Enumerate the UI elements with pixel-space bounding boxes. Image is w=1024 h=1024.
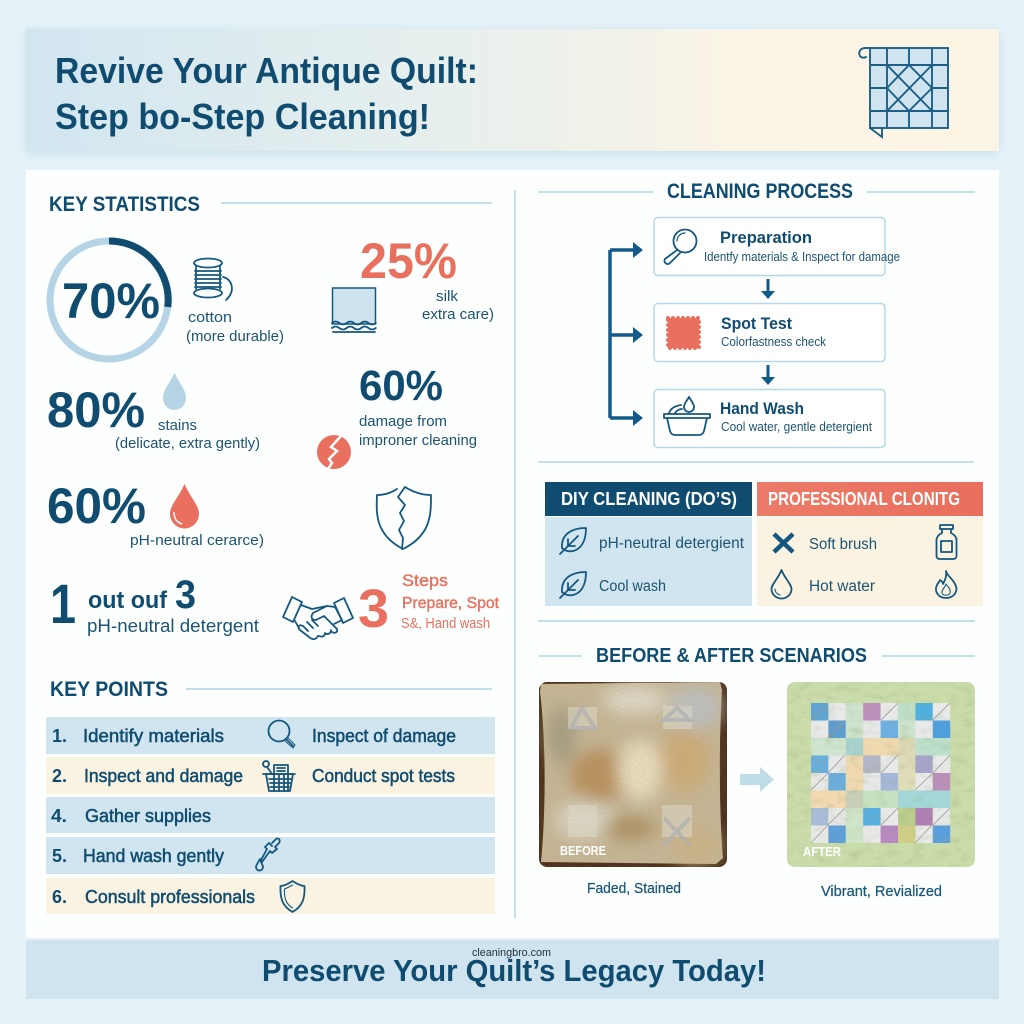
icon: thread spool [194, 258, 232, 300]
stat: 60% damage: damage from [359, 413, 447, 430]
arrow: down 1 [761, 279, 775, 299]
icon: wash basin [664, 397, 710, 435]
row 5 [46, 837, 495, 874]
panel: before and after: Vibrant, Revialized [821, 884, 942, 900]
icon: shield [280, 881, 305, 912]
heading: cleaning process: CLEANING PROCESS [667, 180, 853, 203]
header banner [26, 29, 999, 151]
footer banner: Preserve Your Quilt’s Legacy Today! [262, 953, 766, 988]
stat: 80% stains: (delicate, extra gently) [115, 435, 260, 452]
step: preparation [654, 218, 900, 276]
panel: professional cleaning: Hot water [809, 578, 875, 595]
label: after: AFTER [803, 845, 841, 859]
icon: broken circle [317, 435, 351, 469]
row 1: 1. [52, 726, 67, 746]
icon: magnifier [664, 230, 696, 264]
panel: key statistics [47, 193, 500, 639]
row 5: 5. [52, 846, 67, 866]
stat: 1 out of 3: 1 [50, 572, 76, 635]
icon: flame [936, 571, 956, 598]
panel: key points [46, 678, 495, 914]
panel: before and after [539, 645, 975, 900]
stat: 3 steps: Prepare, Spot [402, 595, 500, 612]
stat: 60% pH-neutral [47, 478, 264, 549]
stat: 60% damage: 60% [359, 362, 443, 410]
icon: leaf 2 [560, 572, 586, 598]
panel: professional cleaning: PROFESSIONAL CLONITG [768, 489, 960, 509]
panel: DIY cleaning: pH-neutral detergient [599, 535, 745, 552]
stat: 80% stains: stains [158, 417, 197, 434]
stat: 60% pH-neutral: 60% [47, 478, 146, 534]
icon: red drop [170, 484, 199, 528]
stat: 60% pH-neutral: pH-neutral cerarce) [130, 532, 264, 549]
row 2: 2. [52, 766, 67, 786]
row 1 [46, 717, 495, 754]
stat: 25% silk: extra care) [422, 306, 494, 323]
row 4: 4. [51, 806, 67, 826]
panel: DIY cleaning: DIY CLEANING (DO’S) [561, 489, 737, 509]
step: spot test: Colorfastness check [721, 335, 827, 349]
row 5: Hand wash gently [83, 846, 224, 866]
title: Step bo-Step Cleaning! [55, 96, 430, 137]
stat: 80% stains: 80% [47, 382, 145, 438]
panel: DIY cleaning [545, 482, 752, 606]
stat: 70% cotton: (more durable) [186, 328, 284, 345]
stat: 70% cotton: cotton [188, 309, 232, 326]
stat: 1 out of 3: pH-neutral detergent [87, 616, 259, 636]
stat: 60% damage: improner cleaning [359, 432, 477, 449]
icon: dropper [256, 838, 280, 870]
stat: 80% stains [47, 373, 260, 452]
photo: before quilt [539, 682, 727, 867]
label: before: BEFORE [560, 844, 606, 858]
footer banner: cleaningbro.com [472, 947, 551, 959]
panel: professional cleaning [757, 482, 983, 606]
stat: 25% silk: 25% [360, 233, 457, 289]
row 6 [46, 878, 495, 914]
stat: 1 out of 3: 3 [175, 573, 196, 617]
icon: fabric swatch [668, 318, 699, 348]
panel: before and after: Faded, Stained [587, 881, 681, 897]
stat: 3 steps: Steps [402, 571, 448, 590]
arrow: side bracket [610, 242, 643, 426]
stat: 1 out of 3: out ouf [88, 587, 168, 614]
row 4 [46, 797, 495, 833]
stat: 70% cotton [50, 241, 284, 359]
heading: key points: KEY POINTS [50, 678, 168, 701]
panel: professional cleaning: Soft brush [809, 536, 877, 553]
row 2: Inspect and damage [84, 766, 243, 786]
icon: water drop [772, 570, 792, 598]
patchwork grid [811, 703, 950, 843]
icon: magnifier [268, 720, 295, 748]
main panel [26, 170, 999, 938]
stat: 60% damage [317, 362, 477, 469]
icon: supply basket [263, 761, 295, 791]
panel: DIY cleaning: Cool wash [599, 578, 666, 595]
stat: 3 steps: S&, Hand wash [401, 615, 490, 632]
row 4: Gather supplies [85, 806, 211, 826]
arrow: before to after [740, 767, 774, 792]
title: Revive Your Antique Quilt: [55, 50, 478, 91]
icon: bottle [936, 525, 956, 559]
heading: before and after: BEFORE & AFTER SCENARIOS [596, 645, 867, 667]
photo: after quilt [787, 682, 975, 867]
stat: 1 out of 3 [50, 572, 259, 636]
row 6: 6. [52, 887, 67, 907]
step: spot test: Spot Test [721, 314, 792, 333]
step: hand wash: Hand Wash [720, 399, 804, 418]
stat: 25% silk [332, 233, 494, 332]
arrow: down 2 [761, 365, 775, 385]
title [55, 50, 478, 137]
icon: X mark [774, 534, 793, 552]
row 1: Inspect of damage [312, 726, 456, 746]
step: preparation: Identfy materials & Inspect for damage [704, 250, 900, 264]
step: spot test [654, 304, 885, 362]
step: hand wash: Cool water, gentle detergient [721, 420, 872, 434]
footer banner [26, 940, 999, 999]
icon: leaf 1 [560, 528, 586, 554]
row 2: Conduct spot tests [312, 766, 455, 786]
row 2 [46, 757, 495, 794]
row 1: Identify materials [83, 726, 224, 746]
stat: 3 steps: 3 [358, 579, 389, 639]
step: hand wash [654, 390, 885, 448]
icon: silk cloth [332, 288, 376, 332]
icon: cracked shield [377, 487, 431, 549]
row 6: Consult professionals [85, 887, 255, 907]
icon: light drop [163, 373, 186, 410]
stat: 70% cotton: 70% [62, 273, 160, 329]
stat: 3 steps [358, 571, 500, 639]
stat: 25% silk: silk [436, 288, 459, 305]
icon: quilt [859, 48, 948, 137]
panel: cleaning process [538, 180, 975, 448]
heading: key statistics: KEY STATISTICS [49, 193, 200, 216]
step: preparation: Preparation [720, 228, 812, 247]
icon: handshake [283, 597, 353, 639]
